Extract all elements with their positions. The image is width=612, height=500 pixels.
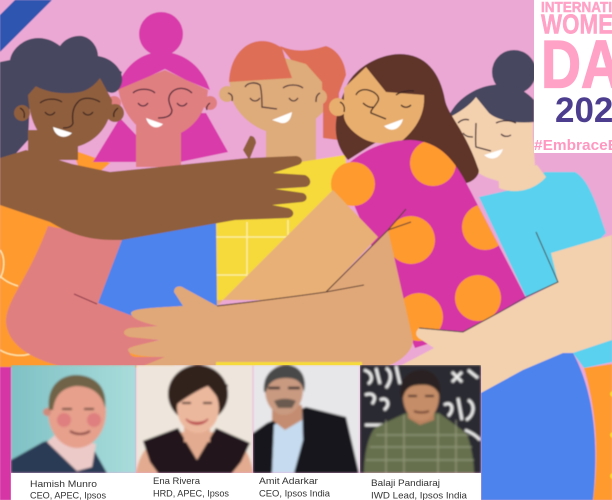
caption: Ena Rivera: HRD, APEC, Ipsos xyxy=(153,488,229,498)
bottom right clothing band xyxy=(481,340,612,500)
magenta polka dot shirt xyxy=(340,140,526,348)
caption: Ena Rivera xyxy=(153,475,229,498)
yellow checked top xyxy=(216,155,350,306)
photo: Balaji Pandiaraj xyxy=(360,365,481,473)
blue top xyxy=(98,222,217,316)
yellow strip above photos xyxy=(216,362,362,366)
caption: Balaji Pandiaraj: Balaji Pandiaraj xyxy=(371,477,440,488)
banner stripe corner xyxy=(0,0,52,52)
brown arm and hand xyxy=(0,136,310,240)
caption: Ena Rivera: Ena Rivera xyxy=(153,475,201,486)
caption: Amit Adarkar xyxy=(259,475,331,498)
woman five: dark bun xyxy=(448,50,606,297)
photo: Hamish Munro xyxy=(11,365,136,473)
white caption band xyxy=(11,473,481,500)
badge year: 202 xyxy=(555,91,612,130)
caption: Amit Adarkar: CEO, Ipsos India xyxy=(259,488,331,498)
white badge panel xyxy=(534,0,612,153)
pink arm xyxy=(6,226,165,366)
caption: Amit Adarkar: Amit Adarkar xyxy=(259,475,318,486)
woman one: dark curly hair xyxy=(0,36,124,160)
woman three: orange hair xyxy=(219,41,346,180)
photo: Amit Adarkar xyxy=(253,365,360,473)
magenta left strip xyxy=(0,367,11,500)
woman two: pink hair xyxy=(93,12,228,167)
orange dot on shoulder xyxy=(331,162,375,206)
orange dress swirl lines xyxy=(0,250,30,355)
woman four: brown hair xyxy=(329,54,479,183)
photo: Ena Rivera xyxy=(136,365,253,473)
orange body of first woman xyxy=(0,150,175,368)
caption: Balaji Pandiaraj xyxy=(371,477,468,500)
caption: Hamish Munro xyxy=(30,478,106,500)
caption: Hamish Munro: Hamish Munro xyxy=(30,478,97,489)
tan arm and hand xyxy=(124,190,413,366)
lower right peach arm xyxy=(398,232,612,393)
